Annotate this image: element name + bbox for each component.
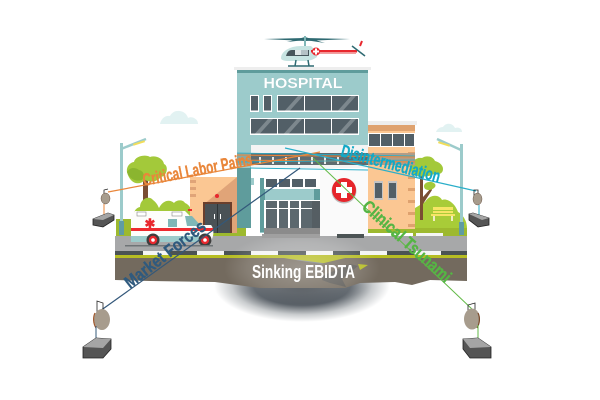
icon: star of life: ✱ xyxy=(145,216,156,231)
weight: top left xyxy=(93,189,114,227)
rope: market forces xyxy=(100,168,300,311)
label: clinical tsunami: Clinical Tsunami xyxy=(358,196,456,287)
grass and shrubs right xyxy=(415,196,467,228)
label: critical labor pains: Critical Labor Pains xyxy=(141,149,254,190)
windows row 2 xyxy=(250,118,359,135)
rope: critical labor pains xyxy=(108,152,320,192)
building: main tower xyxy=(234,67,371,228)
weight: bottom right xyxy=(463,303,491,358)
building: right wing xyxy=(368,121,417,229)
glow behind EBITDA label xyxy=(224,232,380,304)
tree right xyxy=(410,156,443,220)
grass strip left xyxy=(116,219,246,236)
rope: clinical tsunami xyxy=(313,158,474,311)
label: sinking EBIDTA: Sinking EBIDTA xyxy=(252,262,355,282)
shadow beneath ground xyxy=(214,248,390,322)
helicopter xyxy=(264,36,365,66)
ambulance xyxy=(125,209,213,246)
shrubs left xyxy=(133,198,193,225)
building: left annex xyxy=(190,177,237,233)
windows row 1 xyxy=(250,95,359,112)
icon: red cross sign xyxy=(332,178,356,204)
weight: top right xyxy=(469,190,489,227)
bench xyxy=(431,207,455,221)
ground: road and soil xyxy=(115,236,467,288)
weight: bottom left xyxy=(83,301,111,358)
label: disintermediation: Disintermediation xyxy=(339,141,443,186)
street lamp left xyxy=(119,139,146,235)
street lamp right xyxy=(437,139,464,235)
heading: hospital sign: HOSPITAL xyxy=(264,75,342,92)
label: market forces: Market Forces xyxy=(120,216,210,292)
icon: cloud xyxy=(160,111,198,124)
tree left xyxy=(127,156,167,222)
rope: disintermediation xyxy=(285,148,476,191)
rope lines through the building xyxy=(237,153,415,170)
grass strip right xyxy=(368,228,467,236)
icon: cloud right xyxy=(436,124,462,132)
building: entrance block xyxy=(237,145,443,238)
